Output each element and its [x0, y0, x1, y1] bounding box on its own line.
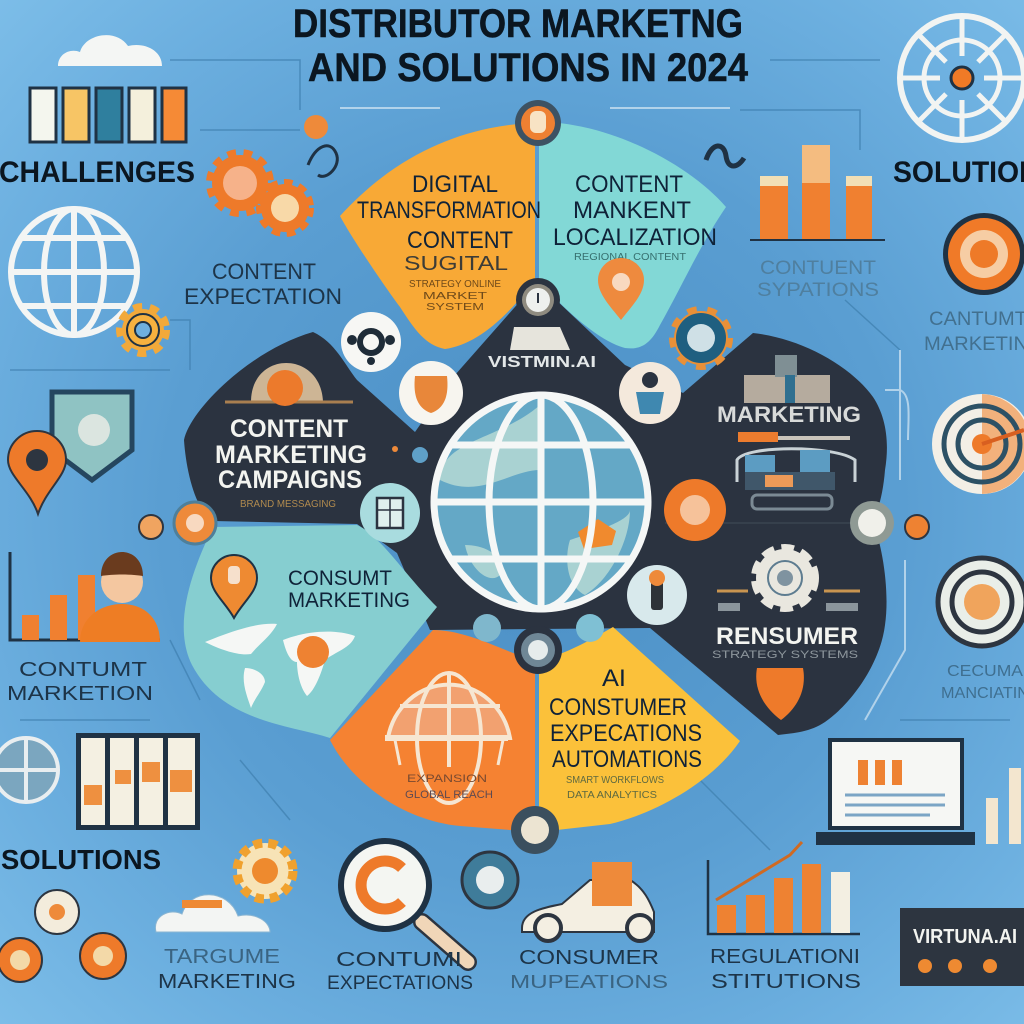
text: digital transformation: STRATEGY ONLINE: [409, 279, 501, 290]
title: DISTRIBUTOR MARKETNG: [293, 2, 743, 46]
icon: node under top: [516, 278, 560, 322]
text: content market localization: LOCALIZATION: [553, 224, 717, 251]
text: consumer mupeations: CONSUMER: [519, 947, 659, 969]
divider between dark right panels: [665, 522, 865, 524]
text: regulation solutions: STITUTIONS: [711, 971, 861, 993]
text: virtual ai: VISTMIN.AI: [488, 354, 596, 371]
text: regulation solutions: REGULATIONI: [710, 946, 860, 968]
icon: cloud and gear: [155, 843, 293, 932]
text: content market localization: MANKENT: [573, 197, 691, 224]
icon: top node: [515, 100, 561, 146]
text: contumi expectations: EXPECTATIONS: [327, 973, 473, 994]
icon: ring nodes around hub: [341, 311, 728, 854]
text: ai consumer expectations automations: CONSTUMER: [549, 694, 687, 721]
text: contumt marketion: MARKETION: [7, 683, 153, 705]
icons: lower left badges: [0, 890, 126, 982]
text: ai consumer expectations automations: SMART WORKFLOWS: [566, 775, 664, 786]
icon: globe left: [11, 209, 137, 335]
icon: growth bar chart: [708, 842, 860, 934]
text: content situations: SYPATIONS: [757, 280, 879, 301]
text: content market localization: [553, 171, 717, 263]
icon: bars top left: [30, 88, 186, 142]
icon: paper under node: [510, 327, 570, 350]
text: content marketing right: MARKETIN: [924, 334, 1024, 355]
icon: car: [522, 862, 654, 941]
text: consumer mandate right: [941, 663, 1024, 702]
text: consumer mupeations: [510, 947, 668, 992]
text: content situations: [757, 258, 879, 301]
icon: film strip panels: [76, 733, 200, 830]
text: orange panel caption: [405, 773, 493, 801]
icon: badge s: [462, 852, 518, 908]
text: consumer mandate right: CECUMA: [947, 663, 1023, 680]
text: consumer marketing: MARKETING: [288, 589, 410, 612]
text: contumi expectations: [327, 949, 473, 994]
circuit connector lines: [10, 60, 1010, 850]
text: ai consumer expectations automations: EXPECATIONS: [550, 720, 702, 747]
panel: virtual ai badge: [900, 908, 1024, 986]
text: digital transformation: MARKET: [423, 291, 487, 302]
icon: small orange dot and marks: [304, 115, 337, 176]
icon: target right lower: [938, 558, 1024, 646]
icon: circle badge lower left: [0, 738, 58, 802]
panel: teal content localization: [539, 122, 726, 348]
panel: yellow digital transformation: [340, 123, 535, 349]
icon: top bars right: [706, 145, 885, 240]
icon: world map: [205, 624, 355, 708]
icon: machine in dark panel: [737, 432, 855, 509]
text: content market localization: CONTENT: [575, 171, 683, 198]
text: content marketing campaigns: [215, 415, 367, 510]
heading: solutions left: SOLUTIONS: [1, 844, 161, 875]
text: targume marketing: TARGUME: [164, 946, 280, 968]
text: ai consumer expectations automations: AI: [602, 665, 626, 692]
text: content marketing campaigns: CAMPAIGNS: [218, 466, 362, 494]
text: ai consumer expectations automations: AUTOMATIONS: [552, 746, 702, 773]
text: marketing: MARKETING: [717, 402, 861, 427]
text: rensumer: RENSUMER: [716, 623, 858, 650]
panel: yellow bottom right: [539, 627, 740, 832]
icon: cog in dark panel: [717, 549, 860, 611]
icon: cloud top left: [58, 35, 162, 66]
text: content expectation: EXPECTATION: [184, 284, 342, 309]
icon: target right middle: [932, 394, 1024, 494]
text: digital transformation: DIGITAL: [412, 171, 498, 198]
icon: building in dark panel: [744, 355, 830, 403]
text: consumer marketing: CONSUMT: [288, 567, 392, 590]
text: content expectation: [184, 259, 342, 309]
icons: connector nodes: [139, 501, 929, 545]
text: targume marketing: MARKETING: [158, 971, 296, 993]
icon: rensumer shield: [756, 668, 804, 720]
text: digital transformation: [357, 171, 541, 313]
icon: left pin and badge: [8, 392, 132, 514]
text: digital transformation: TRANSFORMATION: [357, 197, 541, 224]
panel: orange bottom left: [330, 630, 535, 832]
icon: central globe: [434, 395, 648, 609]
icon: bar chart with person: [10, 552, 160, 642]
text: content marketing campaigns: BRAND MESSAGING: [240, 499, 336, 510]
icon: gear left: [122, 309, 164, 351]
text: consumer mupeations: MUPEATIONS: [510, 972, 668, 992]
text: digital transformation: SUGITAL: [404, 253, 508, 275]
icon: target right: [943, 213, 1024, 295]
text: digital transformation: SYSTEM: [426, 302, 484, 313]
text: orange panel caption: EXPANSION: [407, 773, 487, 785]
icon: pin in teal panel: [598, 258, 644, 320]
text: ai consumer expectations automations: DATA ANALYTICS: [567, 790, 657, 801]
icon: target top right: [900, 16, 1024, 140]
icons: orange gears: [212, 155, 309, 232]
text: content marketing right: CANTUMT: [929, 309, 1024, 330]
icon: small bars right: [986, 768, 1021, 844]
text: rensumer caption: STRATEGY SYSTEMS: [712, 649, 858, 661]
text: contumt marketion: [7, 659, 153, 705]
text: digital transformation: CONTENT: [407, 227, 513, 254]
text: contumi expectations: CONTUMI: [336, 949, 462, 971]
title: AND SOLUTIONS IN 2024: [308, 46, 749, 90]
text: regulation solutions: [710, 946, 861, 993]
icon: teal panel pin: [211, 555, 257, 618]
text: content market localization: REGIONAL CONTENT: [574, 252, 686, 263]
icon: magnifying glass: [341, 841, 468, 962]
icon: laptop chart: [816, 740, 975, 845]
text: content situations: CONTUENT: [760, 258, 876, 279]
text: content marketing campaigns: MARKETING: [215, 441, 367, 469]
panel: dark central silhouette: [184, 282, 887, 735]
heading: challenges: CHALLENGES: [0, 156, 195, 189]
text: orange panel caption: GLOBAL REACH: [405, 789, 493, 801]
text: content marketing campaigns: CONTENT: [230, 415, 348, 443]
icon: dark panel orange figure: [225, 363, 353, 406]
text: ai consumer expectations automations: [549, 665, 702, 801]
icon: orange dome globe: [385, 673, 510, 803]
text: contumt marketion: CONTUMT: [19, 659, 147, 681]
text: consumer marketing: [288, 567, 410, 612]
text: content marketing right: [924, 309, 1024, 355]
text: targume marketing: [158, 946, 296, 993]
panel: teal lower left consumer marketing: [184, 525, 437, 738]
text: content expectation: CONTENT: [212, 259, 316, 284]
title: [293, 2, 749, 90]
